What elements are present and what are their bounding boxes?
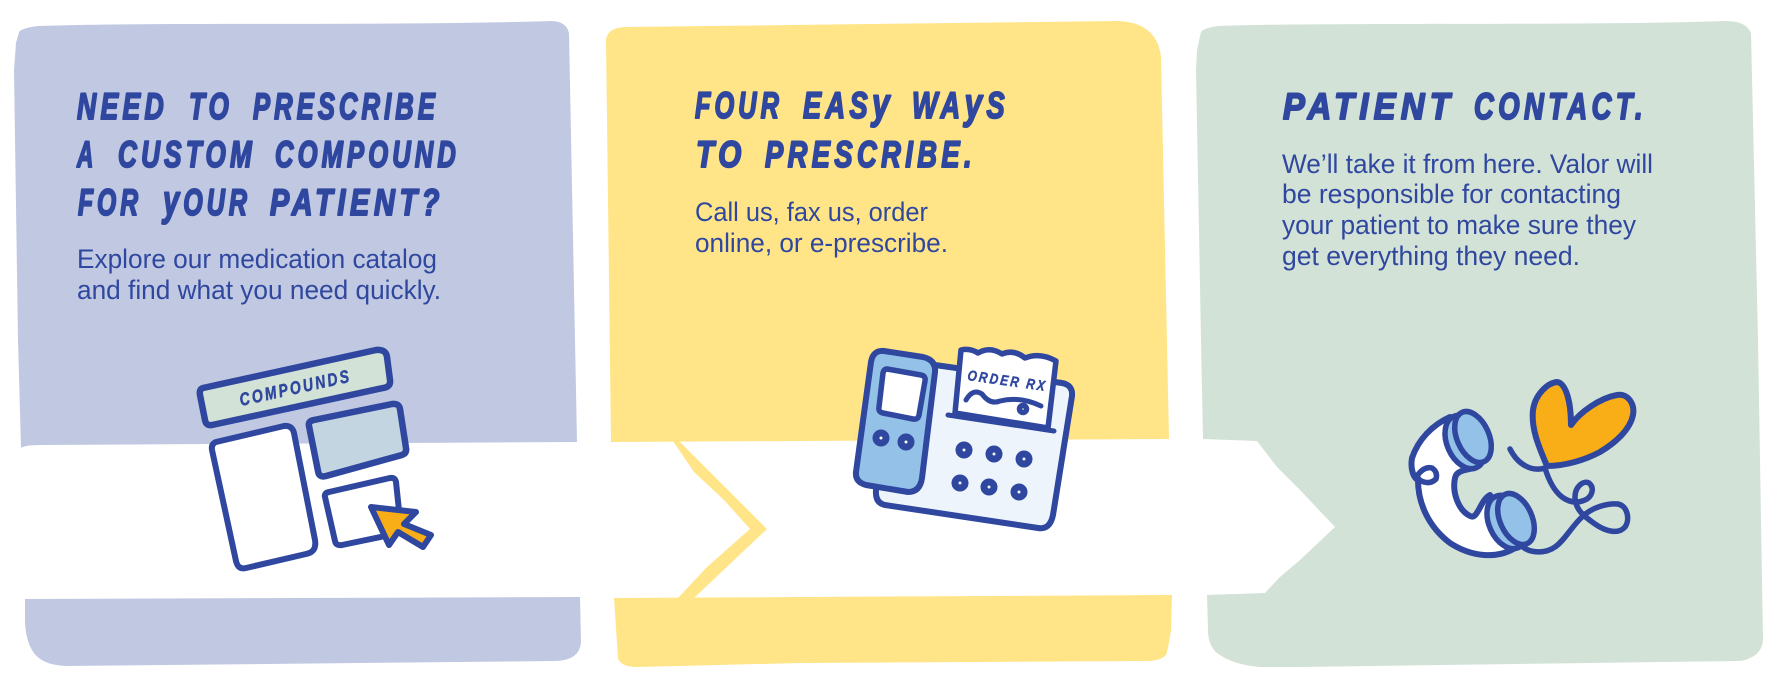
panel: patient contact <box>1196 21 1763 667</box>
heading: four easy ways: EASy <box>803 80 894 128</box>
body text: explore catalog: Explore our medication catalog <box>77 244 437 274</box>
body text: we'll take it from here: your patient to make sure they <box>1282 210 1636 240</box>
heading: need to prescribe: TO <box>189 86 233 127</box>
heading: need to prescribe: PATIENT? <box>270 182 444 223</box>
heading: need to prescribe: PRESCRIBE <box>253 86 439 127</box>
heading: four easy ways: PRESCRIBE. <box>765 134 976 175</box>
body text: call fax order: Call us, fax us, order <box>695 197 928 227</box>
heading: four easy ways: WAyS <box>912 80 1009 128</box>
body text: explore catalog: and find what you need quickly. <box>77 275 441 305</box>
icon: compounds catalog with cursor <box>200 350 431 568</box>
heading: four easy ways: TO <box>696 134 746 175</box>
upper earcup <box>1437 406 1499 475</box>
panel: need to prescribe <box>14 21 581 666</box>
body text: explore catalog <box>77 244 441 305</box>
fax body <box>876 365 1072 528</box>
small white tile <box>325 478 400 545</box>
heading: four easy ways: FOUR <box>695 85 783 126</box>
arrow: yellow chevron <box>673 441 767 598</box>
heading: patient contact <box>1283 86 1647 127</box>
panel: four easy ways <box>606 21 1172 667</box>
body text: we'll take it from here: be responsible for contacting <box>1282 179 1621 209</box>
heading: need to prescribe: A <box>76 134 97 175</box>
paper: order rx <box>948 349 1056 431</box>
handset body <box>1411 417 1515 555</box>
compounds label bar: COMPOUNDS <box>238 366 353 410</box>
icon: telephone handset with heart cord <box>1411 382 1633 555</box>
heading: need to prescribe: NEED <box>77 86 168 127</box>
body text: we'll take it from here: get everything they need. <box>1282 241 1580 271</box>
handset <box>856 351 935 492</box>
body text: call fax order <box>695 197 948 258</box>
body text: we'll take it from here: We’ll take it from here. Valor will <box>1282 149 1653 179</box>
heading: need to prescribe: yOUR <box>162 177 251 225</box>
heading: need to prescribe <box>76 86 460 225</box>
keypad <box>955 445 1029 497</box>
body text: call fax order: online, or e-prescribe. <box>695 228 948 258</box>
heading: need to prescribe: COMPOUND <box>275 134 460 175</box>
cursor arrow <box>371 507 431 547</box>
small loop <box>1417 468 1436 483</box>
body text: we'll take it from here <box>1282 149 1653 271</box>
lower earcup <box>1479 488 1542 555</box>
heading: four easy ways <box>695 80 1009 175</box>
phone cord <box>1510 449 1628 552</box>
icon: fax machine <box>856 349 1072 528</box>
paper: order rx: ORDER RX <box>966 368 1048 395</box>
heading: need to prescribe: FOR <box>78 182 142 223</box>
tall white tile <box>212 426 315 568</box>
blue-gray tile <box>309 404 406 476</box>
heading: need to prescribe: CUSTOM <box>118 134 256 175</box>
heading: patient contact: CONTACT. <box>1474 86 1647 127</box>
heart <box>1533 382 1633 466</box>
compounds label bar <box>200 350 390 425</box>
heading: patient contact: PATIENT <box>1283 86 1455 127</box>
